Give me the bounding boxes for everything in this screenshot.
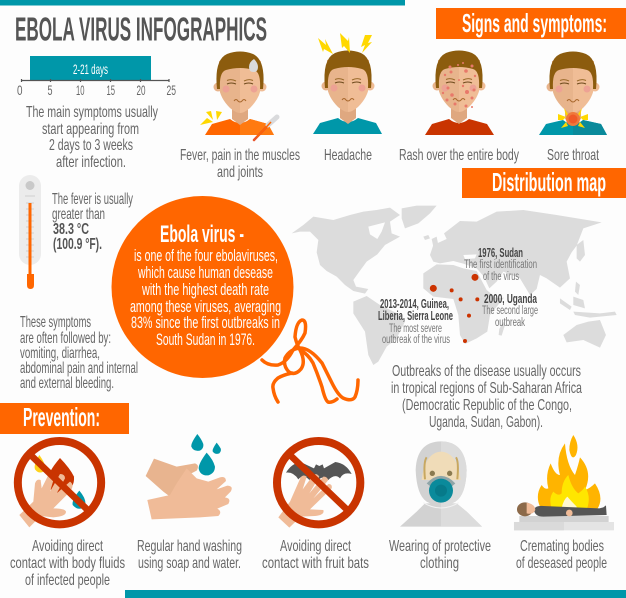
map label: Uganda: outbreak	[495, 317, 525, 329]
callout: ebola virus definition: with the highest death rate	[141, 281, 269, 299]
map label: Uganda: The second large	[482, 305, 538, 317]
text: fever threshold: 38.3 °C	[53, 221, 89, 238]
text: symptom onset: after infection.	[56, 154, 126, 171]
caption: headache: Headache	[324, 147, 372, 164]
caption: fever: Fever, pain in the muscles	[180, 147, 300, 164]
map label: Sudan: of the virus	[483, 271, 519, 283]
caption: body fluids: of infected people	[25, 572, 110, 589]
icon: no contact with bats	[277, 441, 360, 528]
map label: Sudan	[464, 246, 537, 283]
caption: sore throat: Sore throat	[547, 147, 599, 164]
map label: Guinea: The most severe	[389, 323, 442, 335]
caption: hand washing: Regular hand washing	[137, 538, 242, 555]
map label: Guinea: Liberia, Sierra Leone	[378, 309, 453, 323]
caption: clothing: Wearing of protective	[389, 538, 491, 555]
map label: Guinea	[378, 297, 453, 346]
top bar	[0, 0, 405, 6]
timeline chart	[17, 56, 176, 98]
timeline chart: 15	[106, 83, 115, 98]
callout: ebola virus definition	[112, 196, 294, 378]
map label: Guinea: outbreak of the virus	[382, 334, 450, 346]
text: fever threshold	[52, 191, 133, 253]
text: symptom onset: 2 days to 3 weeks	[49, 137, 133, 154]
text: following symptoms: and external bleeding.	[20, 375, 114, 392]
map label: Sudan: The first identification	[464, 259, 537, 271]
icon: ebola virus filament	[262, 320, 358, 402]
icon: rash patient	[425, 50, 494, 135]
timeline chart: 20	[136, 83, 146, 98]
caption: bats: Avoiding direct	[280, 538, 351, 555]
callout: ebola virus definition: South Sudan in 1976.	[156, 331, 255, 349]
text: fever threshold: greater than	[52, 206, 105, 223]
callout: ebola virus definition: is one of the four ebolaviruses,	[134, 247, 278, 265]
callout: ebola virus definition: which cause human desease	[137, 264, 273, 282]
map label: Guinea: 2013-2014, Guinea,	[380, 297, 449, 311]
timeline chart: 2-21 days	[73, 61, 108, 77]
icon: sore throat patient	[539, 52, 607, 135]
icon: fever patient	[200, 52, 277, 140]
caption: clothing	[389, 538, 491, 572]
icon: cremation	[514, 435, 614, 530]
heading: prevention: Prevention:	[23, 402, 100, 432]
text: fever threshold: (100.9 °F).	[53, 236, 102, 253]
caption: cremation	[516, 538, 607, 572]
map label: Uganda: 2000, Uganda	[484, 292, 538, 306]
text: symptom onset	[26, 104, 158, 171]
text: outbreak regions: Uganda, Sudan, Gabon).	[429, 414, 543, 431]
text: following symptoms: are often followed by:	[20, 330, 111, 347]
timeline chart: 5	[48, 83, 52, 98]
text: following symptoms: These symptoms	[20, 314, 91, 331]
icon: headache patient	[313, 33, 382, 134]
title: EBOLA VIRUS INFOGRAPHICS	[15, 10, 267, 48]
world map	[292, 206, 617, 365]
map label: Uganda	[482, 292, 538, 329]
text: following symptoms	[20, 314, 138, 392]
caption: fever: and joints	[217, 164, 263, 181]
text: fever threshold: The fever is usually	[52, 191, 133, 208]
text: following symptoms: vomiting, diarrhea,	[20, 345, 100, 362]
icon: hand washing	[146, 434, 232, 519]
icon: protective clothing	[400, 441, 482, 527]
text: symptom onset: start appearing from	[42, 121, 139, 138]
callout: ebola virus definition: 83% since the first outbreaks in	[131, 314, 280, 332]
caption: bats	[262, 538, 369, 572]
text: outbreak regions	[391, 363, 582, 431]
map label: Sudan: 1976, Sudan	[478, 246, 523, 260]
caption: fever	[180, 147, 300, 181]
icon: no contact with body fluids	[18, 441, 101, 527]
heading: prevention	[0, 402, 129, 434]
caption: rash: Rash over the entire body	[399, 147, 519, 164]
caption: body fluids: Avoiding direct	[32, 538, 103, 555]
callout: ebola virus definition: Ebola virus -	[160, 221, 244, 248]
caption: hand washing	[137, 538, 242, 572]
caption: bats: contact with fruit bats	[262, 555, 369, 572]
timeline chart: 0	[17, 83, 22, 98]
caption: body fluids: contact with body fluids	[10, 555, 125, 572]
caption: hand washing: using soap and water.	[138, 555, 241, 572]
icon: thermometer	[19, 175, 41, 289]
timeline chart: 25	[166, 83, 176, 98]
callout: ebola virus definition: among these viruses, averaging	[130, 298, 281, 316]
text: following symptoms: abdominal pain and internal	[20, 360, 138, 377]
caption: body fluids	[10, 538, 125, 589]
text: symptom onset: The main symptoms usually	[26, 104, 158, 121]
timeline chart: 10	[76, 83, 84, 98]
bottom bar	[125, 590, 626, 598]
caption: clothing: clothing	[420, 555, 459, 572]
